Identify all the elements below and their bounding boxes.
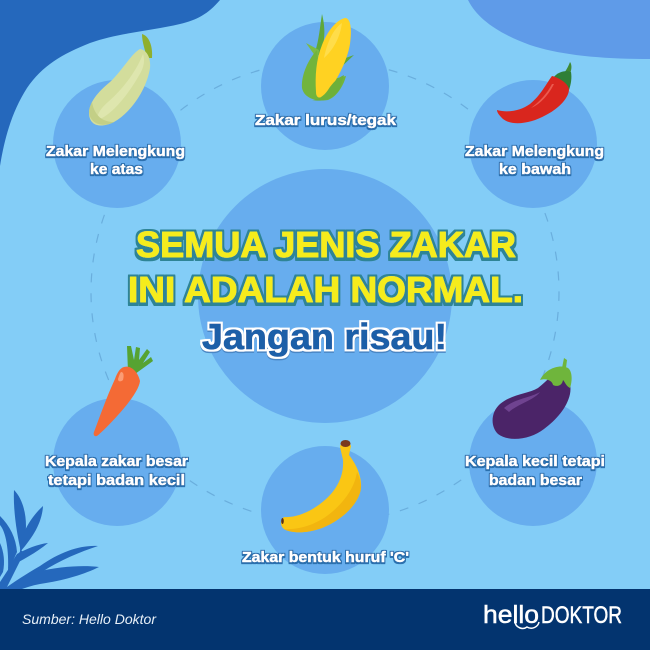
- logo: DOKTOR: [541, 602, 622, 629]
- label: curved down: Zakar Melengkung: [465, 143, 604, 160]
- panel: circle top-right: [469, 80, 597, 208]
- icon: zucchini: [89, 34, 152, 126]
- heading line 1: SEMUA JENIS ZAKAR: [136, 224, 516, 265]
- label: curved up: [46, 143, 185, 178]
- label: small head: Kepala kecil tetapi: [465, 453, 605, 470]
- title: [128, 224, 523, 357]
- icon: carrot: [94, 346, 153, 436]
- panel: central circle: [198, 169, 452, 423]
- label: curved down: ke bawah: [499, 161, 571, 178]
- panel: circle bottom-left: [53, 398, 181, 526]
- panel: circle top-left: [53, 80, 181, 208]
- label: small head: [465, 453, 605, 489]
- label: small head: badan besar: [489, 472, 582, 489]
- source text: Sumber: Hello Doktor: [22, 612, 157, 627]
- subheading: Jangan risau!: [202, 316, 447, 357]
- logo: [483, 601, 622, 629]
- icon: banana: [281, 440, 361, 532]
- label: curved up: ke atas: [90, 161, 143, 178]
- panel: circle bottom-right: [469, 398, 597, 526]
- background shape: top-right blob: [468, 0, 650, 59]
- background shape: top-left blob: [0, 0, 220, 166]
- label: C shape: Zakar bentuk huruf 'C': [242, 549, 409, 566]
- label: big head: Kepala zakar besar: [45, 453, 188, 470]
- label: big head: tetapi badan kecil: [48, 472, 185, 489]
- icon: palm leaves: [0, 490, 99, 589]
- icon: chili: [497, 62, 571, 123]
- logo: hello: [483, 601, 539, 629]
- panel: circle top: [261, 22, 389, 150]
- icon: corn: [302, 14, 354, 101]
- label: curved up: Zakar Melengkung: [46, 143, 185, 160]
- label: curved down: [465, 143, 604, 178]
- label: big head: [45, 453, 188, 489]
- panel: circle bottom: [261, 446, 389, 574]
- label: straight: Zakar lurus/tegak: [255, 112, 397, 129]
- heading line 2: INI ADALAH NORMAL.: [128, 269, 523, 310]
- icon: eggplant: [493, 358, 572, 439]
- footer bar: [0, 589, 650, 650]
